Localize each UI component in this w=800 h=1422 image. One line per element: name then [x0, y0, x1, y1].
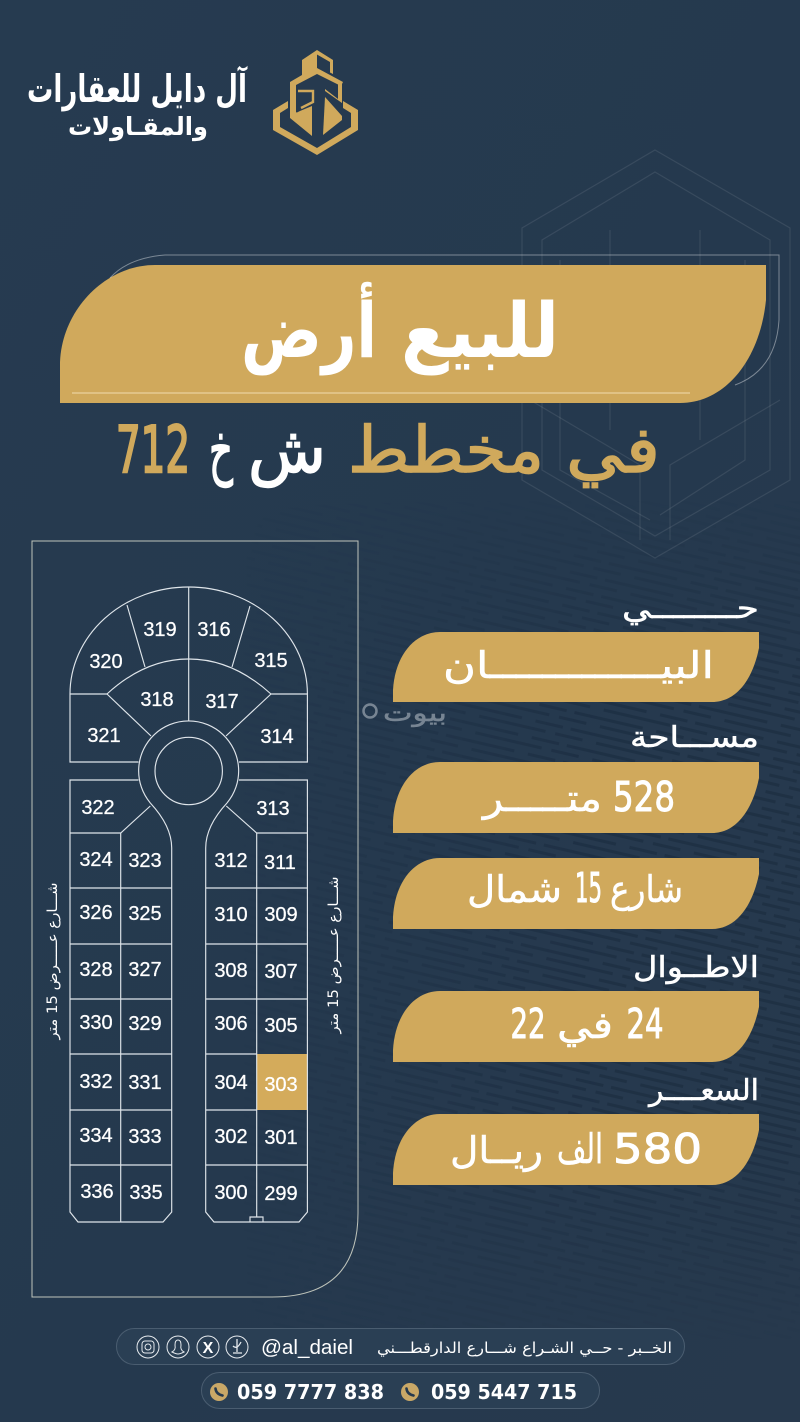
price pill	[393, 1114, 759, 1185]
district pill	[393, 632, 759, 702]
plot numbers: 322	[81, 797, 115, 819]
watermark: بيوت	[383, 699, 447, 727]
plot numbers: 332	[79, 1071, 113, 1093]
plot numbers: 307	[264, 961, 298, 983]
highlighted plot 303	[257, 1054, 308, 1110]
price label: السعــــر	[647, 1073, 759, 1107]
dimensions pill: في	[557, 1004, 613, 1047]
plot numbers: 317	[205, 691, 239, 713]
dimensions pill	[393, 991, 759, 1062]
phone number 1: 059 7777 838	[237, 1380, 384, 1404]
plot lines	[70, 587, 307, 1222]
plot numbers: 302	[214, 1126, 248, 1148]
plot numbers: 299	[264, 1183, 298, 1205]
dimensions pill: 24	[626, 1000, 664, 1048]
plot numbers: 320	[89, 651, 123, 673]
background	[454, 616, 800, 1224]
plot numbers: 331	[128, 1072, 162, 1094]
street pill	[393, 858, 759, 929]
dimensions pill: 22	[510, 1000, 546, 1048]
plot numbers: 303	[264, 1074, 298, 1096]
background hexagon outlines	[522, 150, 790, 558]
plot numbers: 328	[79, 959, 113, 981]
price pill: ريــال	[450, 1129, 543, 1172]
plot numbers: 308	[214, 960, 248, 982]
plot numbers: 318	[140, 689, 174, 711]
plot numbers: 334	[79, 1125, 113, 1147]
plot numbers: 310	[214, 904, 248, 926]
plot numbers: 305	[264, 1015, 298, 1037]
area label: مســـاحة	[630, 720, 759, 754]
plot numbers: 333	[128, 1126, 162, 1148]
district label: حــــــــي	[622, 591, 759, 626]
icon: tiktok-style logo	[226, 1336, 248, 1358]
plot numbers: 325	[128, 903, 162, 925]
subtitle: ش	[248, 414, 326, 488]
street label left: شـــارع عـــــرض 15 متر	[45, 882, 61, 1041]
area pill: متـــــر	[481, 777, 602, 820]
details panel	[393, 591, 759, 1185]
plot numbers: 300	[214, 1182, 248, 1204]
banner heading: أرض	[241, 281, 377, 376]
price pill: 580	[613, 1125, 702, 1173]
dimensions label: الاطــوال	[633, 950, 759, 984]
plan frame	[32, 541, 358, 1297]
subtitle: مخطط	[348, 414, 544, 488]
address: الخــبر - حــي الشـراع شـــارع الدارقطـــني	[377, 1339, 672, 1358]
plot numbers: 313	[256, 798, 290, 820]
plot numbers: 329	[128, 1013, 162, 1035]
plot numbers: 326	[79, 902, 113, 924]
footer contact bar	[116, 1328, 684, 1364]
plot numbers: 319	[143, 619, 177, 641]
plot numbers	[79, 619, 298, 1205]
banner heading: للبيع	[401, 286, 559, 376]
icon: x	[197, 1336, 219, 1358]
phone number 2: 059 5447 715	[431, 1380, 577, 1404]
area pill	[393, 762, 759, 833]
street label right: شـــارع عـــــرض 15 متر	[326, 876, 342, 1035]
plot numbers: 321	[87, 725, 121, 747]
plot numbers: 316	[197, 619, 231, 641]
footer phones	[202, 1372, 600, 1408]
title banner	[60, 255, 779, 403]
banner heading	[241, 281, 559, 376]
street pill: شارع	[610, 868, 683, 911]
plot numbers: 315	[254, 650, 288, 672]
area pill: 528	[613, 773, 675, 821]
price pill: الف	[557, 1125, 603, 1173]
logo text line 2: والمقـاولات	[68, 112, 208, 142]
street pill: شمال	[467, 868, 562, 911]
logo icon	[273, 50, 358, 155]
subtitle: 712	[116, 414, 190, 488]
plot numbers: 304	[214, 1072, 248, 1094]
plot numbers: 336	[80, 1181, 114, 1203]
plot numbers: 306	[214, 1013, 248, 1035]
logo	[27, 50, 358, 155]
plot numbers: 311	[264, 852, 296, 874]
icon: phone 1	[210, 1383, 228, 1401]
plot numbers: 335	[129, 1182, 163, 1204]
district pill: البيـــــــــــــان	[443, 644, 714, 687]
subtitle: في	[566, 414, 660, 488]
icon: phone 2	[401, 1383, 419, 1401]
watermark	[364, 699, 447, 727]
plot numbers: 323	[128, 850, 162, 872]
icon: x: X	[203, 1340, 214, 1357]
site plan	[32, 541, 358, 1297]
subtitle: خ	[209, 414, 233, 488]
plot numbers: 330	[79, 1012, 113, 1034]
plot numbers: 309	[264, 904, 298, 926]
plot numbers: 324	[79, 849, 113, 871]
street pill: 15	[575, 864, 602, 912]
plot numbers: 314	[260, 726, 294, 748]
subtitle	[116, 414, 660, 488]
social handle: @al_daiel	[261, 1337, 353, 1359]
icon: instagram	[137, 1336, 159, 1358]
plot numbers: 327	[128, 959, 162, 981]
logo text line 1: آل دايل للعقارات	[27, 65, 248, 111]
plot numbers: 312	[214, 850, 248, 872]
plot numbers: 301	[264, 1127, 298, 1149]
icon: snapchat	[167, 1336, 189, 1358]
